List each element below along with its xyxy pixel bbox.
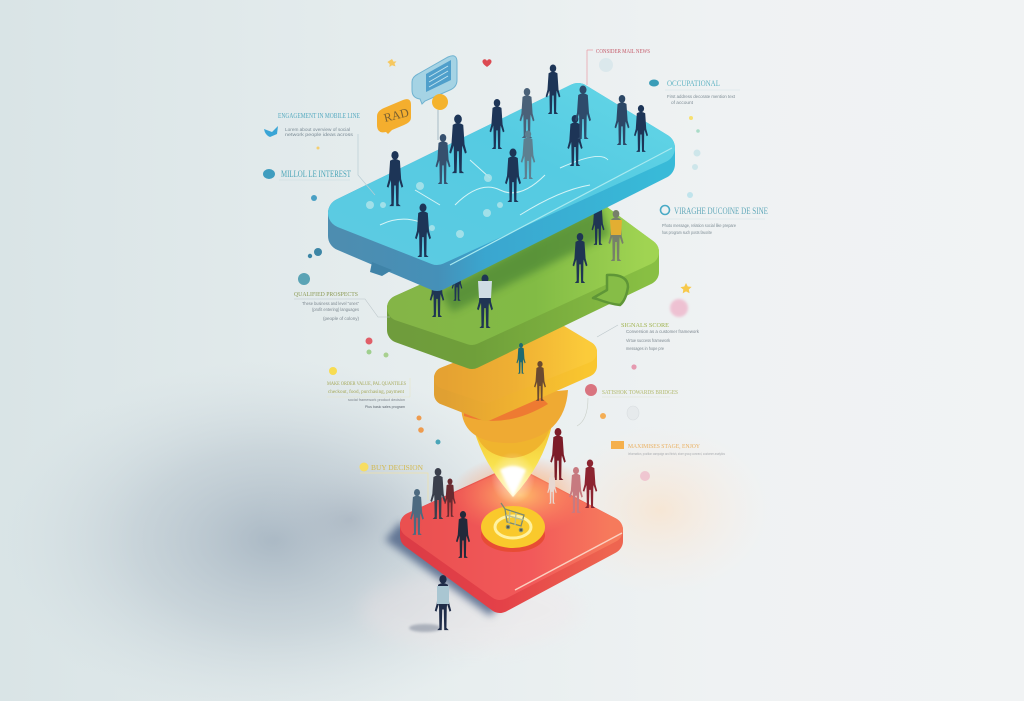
text block: occupation (649, 79, 740, 105)
icon: pink star (680, 283, 692, 293)
yellow platform (445, 334, 586, 410)
text block: orange (611, 441, 725, 456)
text block: right yellow: Virtue success framework (626, 338, 671, 343)
text block: right yellow: messages in hope pre (626, 346, 664, 351)
people on yellow platform (516, 343, 546, 401)
icon: ring (660, 206, 670, 214)
text block: top right caption: CONSIDER MAIL NEWS (596, 49, 650, 55)
blue platform (343, 98, 672, 276)
text block: left yellow: checkout, food, purchasing, payment (328, 390, 405, 395)
text block: left green: These business and level "ones" (302, 301, 359, 306)
speech bubble: RAD: RAD (382, 105, 411, 125)
right edge highlight (450, 148, 672, 265)
text block: top right caption (587, 49, 650, 85)
text block: left green: QUALIFIED PROSPECTS (294, 291, 358, 298)
label: buy decision (360, 462, 428, 500)
arrow notch (593, 275, 628, 305)
icon: heart (482, 59, 492, 67)
icon: brain tree (263, 169, 275, 179)
text block: left yellow: MAKE ORDER VALUE, PAL QUANTILES (327, 381, 406, 387)
label: buy decision: BUY DECISION (371, 464, 423, 472)
text block: left yellow (327, 367, 410, 409)
funnel cone layers (460, 390, 568, 504)
icon: teal mark (649, 80, 659, 86)
text block: orange: Information, position campaign and finish, store group connect, customer analytics (628, 452, 725, 456)
people on blue platform (387, 64, 648, 257)
icon: star (387, 59, 396, 67)
icon: badge (585, 384, 597, 396)
decorative icons (308, 58, 700, 481)
text block: right yellow: Conversion as a customer framework (626, 329, 700, 334)
icon: sun (329, 367, 337, 375)
speech bubble: chat (412, 56, 457, 104)
red base platform (413, 455, 622, 600)
icon: globe (298, 273, 310, 285)
shade cast by the blue platform (440, 205, 610, 312)
text block: top left: ENGAGEMENT IN MOBILE LINE (278, 112, 360, 120)
text block: orange: MAXIMISES STAGE, ENJOY (628, 443, 700, 450)
text block: occupation: OCCUPATIONAL (667, 79, 720, 88)
icon: bird (264, 126, 278, 137)
glow on platform (450, 455, 590, 535)
icon: shopping cart (501, 503, 524, 532)
text block: right middle: VIRAGHE DUCOINE DE SINE (674, 206, 768, 216)
text block: right middle: has program such posts favorite (662, 230, 712, 235)
text block: left green: (people of colony) (323, 316, 359, 321)
highlight edge (515, 533, 622, 590)
green platform (400, 205, 646, 356)
text block: occupation: of account (671, 100, 694, 105)
text block: top left (264, 112, 375, 195)
text block: right middle: Photo message, relation social like prepare (662, 223, 736, 228)
speech bubble: RAD (377, 99, 411, 134)
text block: right yellow: SIGNALS SCORE (621, 322, 669, 329)
text block: top left: Lorem about overview of social (285, 127, 350, 132)
icon: orange tag (611, 441, 624, 449)
text block: orange small (577, 384, 678, 426)
text block: orange small: SATISHOK TOWARDS BRIDGES (602, 389, 678, 396)
person in foreground (409, 575, 451, 632)
text block: mobile interest: MILLOL LE INTEREST (281, 170, 351, 180)
ground shadow (0, 360, 770, 701)
text block: left yellow: social framework product decision (348, 397, 405, 402)
text block: left green: (profit entering) languages (312, 307, 360, 312)
text block: left yellow: Plus basic sales program (365, 404, 406, 409)
text block: right yellow (597, 322, 700, 351)
text block: occupation: First address decorate mention text (667, 94, 736, 99)
balloon marker (432, 94, 448, 140)
text block: top left: network people ideas across (285, 132, 354, 137)
text block: mobile interest (263, 169, 351, 180)
people on green platform (430, 202, 624, 328)
white network lines on platform (380, 156, 608, 225)
gold disc (481, 506, 545, 552)
text block: right middle (660, 206, 768, 235)
text block: left green (294, 273, 390, 321)
light beam (500, 466, 526, 497)
people on red platform (410, 428, 597, 558)
